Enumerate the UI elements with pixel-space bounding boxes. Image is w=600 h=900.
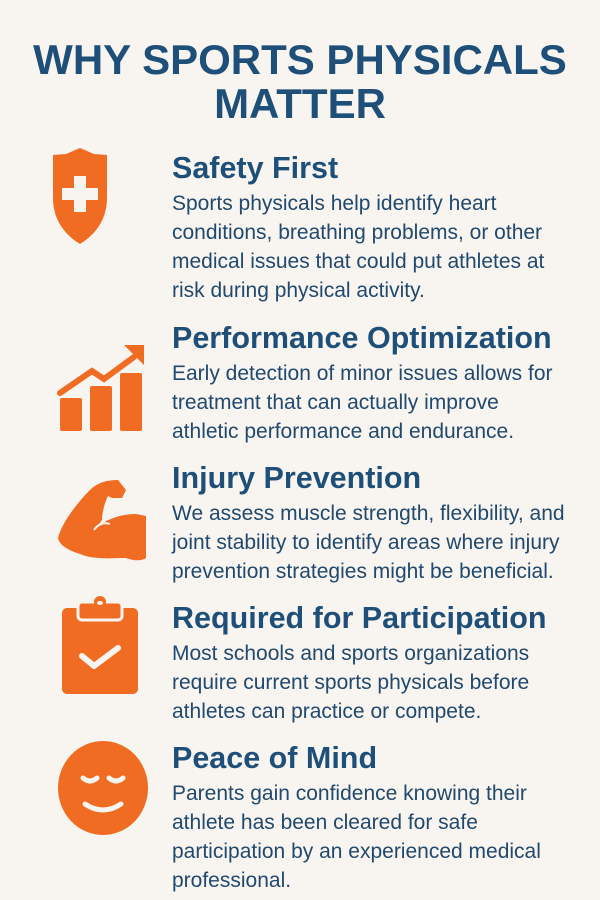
icon: muscle <box>58 480 146 560</box>
section: performance: Performance Optimization <box>172 321 552 355</box>
section: required: Most schools and sports organizations require current sports physicals before athletes can practice or compete. <box>172 642 529 723</box>
section: performance <box>172 321 552 443</box>
section: peace: Parents gain confidence knowing their athlete has been cleared for safe participation by an experienced medical professional. <box>172 782 541 892</box>
section: injury: We assess muscle strength, flexibility, and joint stability to identify areas where injury prevention strategies might be beneficial. <box>172 502 565 583</box>
section: safety: Sports physicals help identify heart conditions, breathing problems, or other medical issues that could put athletes at risk during physical activity. <box>172 192 544 302</box>
icon: face <box>58 741 148 835</box>
section: safety: Safety First <box>172 151 338 185</box>
section: required <box>172 601 547 723</box>
title: WHY SPORTS PHYSICALS <box>33 36 567 83</box>
section: required: Required for Participation <box>172 601 547 635</box>
section: injury: Injury Prevention <box>172 461 421 495</box>
icon: clipboard <box>62 596 138 694</box>
icon: shield <box>53 148 107 244</box>
section: injury <box>172 461 565 583</box>
title <box>33 36 567 127</box>
icon: chart <box>57 345 144 431</box>
title: MATTER <box>214 80 386 127</box>
section: performance: Early detection of minor issues allows for treatment that can actually improve athletic performance and endurance. <box>172 362 552 443</box>
section: peace: Peace of Mind <box>172 741 377 775</box>
